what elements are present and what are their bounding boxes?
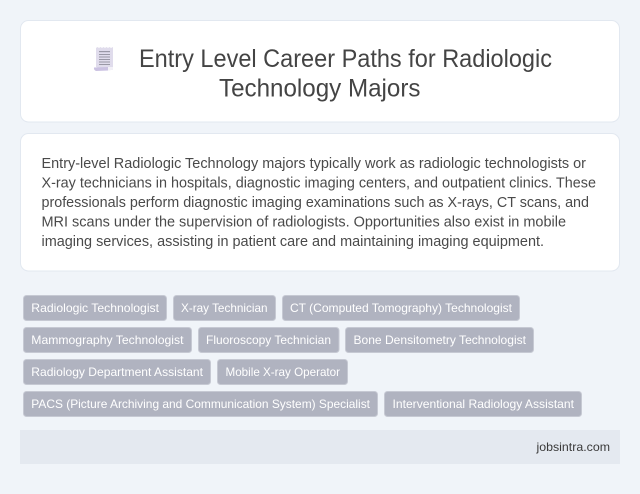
tag: Mobile X-ray Operator — [218, 360, 348, 384]
tag: Radiology Department Assistant: Radiology Department Assistant — [31, 365, 204, 379]
panel: description — [20, 134, 620, 271]
tag: Mammography Technologist: Mammography Technologist — [31, 333, 184, 347]
tag: Radiologic Technologist — [24, 296, 166, 320]
tag: X-ray Technician: X-ray Technician — [181, 301, 268, 315]
text block: description paragraph: imaging services, assisting in patient care and maintaining imaging equipment. — [42, 234, 544, 250]
title — [139, 45, 552, 102]
tag: Interventional Radiology Assistant: Interventional Radiology Assistant — [392, 397, 575, 411]
tag: X-ray Technician — [174, 296, 276, 320]
tag: Fluoroscopy Technician — [198, 328, 339, 352]
text block: description paragraph: professionals perform diagnostic imaging examinations such as X-rays, CT scans, and — [42, 195, 589, 211]
panel: title card — [20, 20, 620, 122]
tag list: career paths — [24, 296, 582, 416]
tag: PACS Specialist: PACS (Picture Archiving and Communication System) Specialist — [31, 397, 371, 411]
title: Entry Level Career Paths for Radiologic — [139, 45, 552, 73]
tag: Radiology Department Assistant — [24, 360, 210, 384]
footer: source text: jobsintra.com — [535, 440, 610, 454]
tag: Mobile X-ray Operator: Mobile X-ray Operator — [226, 365, 340, 379]
tag: Bone Densitometry Technologist: Bone Densitometry Technologist — [354, 333, 527, 347]
tag: Radiologic Technologist: Radiologic Technologist — [31, 301, 160, 315]
text block: description paragraph: MRI scans under the supervision of radiologists. Opportunities also exist in mobile — [42, 214, 566, 230]
tag: CT Technologist — [282, 296, 520, 320]
text block: description paragraph — [42, 156, 596, 250]
text block: description paragraph: Entry-level Radiologic Technology majors typically work as radiologic technologists or — [42, 156, 586, 172]
title: Technology Majors — [219, 74, 420, 102]
tag: Interventional Radiology Assistant — [384, 392, 582, 416]
tag: Bone Densitometry Technologist — [346, 328, 534, 352]
text block: description paragraph: X-ray technicians in hospitals, diagnostic imaging centers, and outpatient clinics. These — [42, 176, 596, 192]
tag: Fluoroscopy Technician: Fluoroscopy Technician — [206, 333, 331, 347]
tag: CT Technologist: CT (Computed Tomography) Technologist — [290, 301, 513, 315]
icon: document scroll — [94, 47, 113, 71]
tag: Mammography Technologist — [24, 328, 192, 352]
footer bar — [20, 430, 620, 464]
tag: PACS Specialist — [24, 392, 378, 416]
